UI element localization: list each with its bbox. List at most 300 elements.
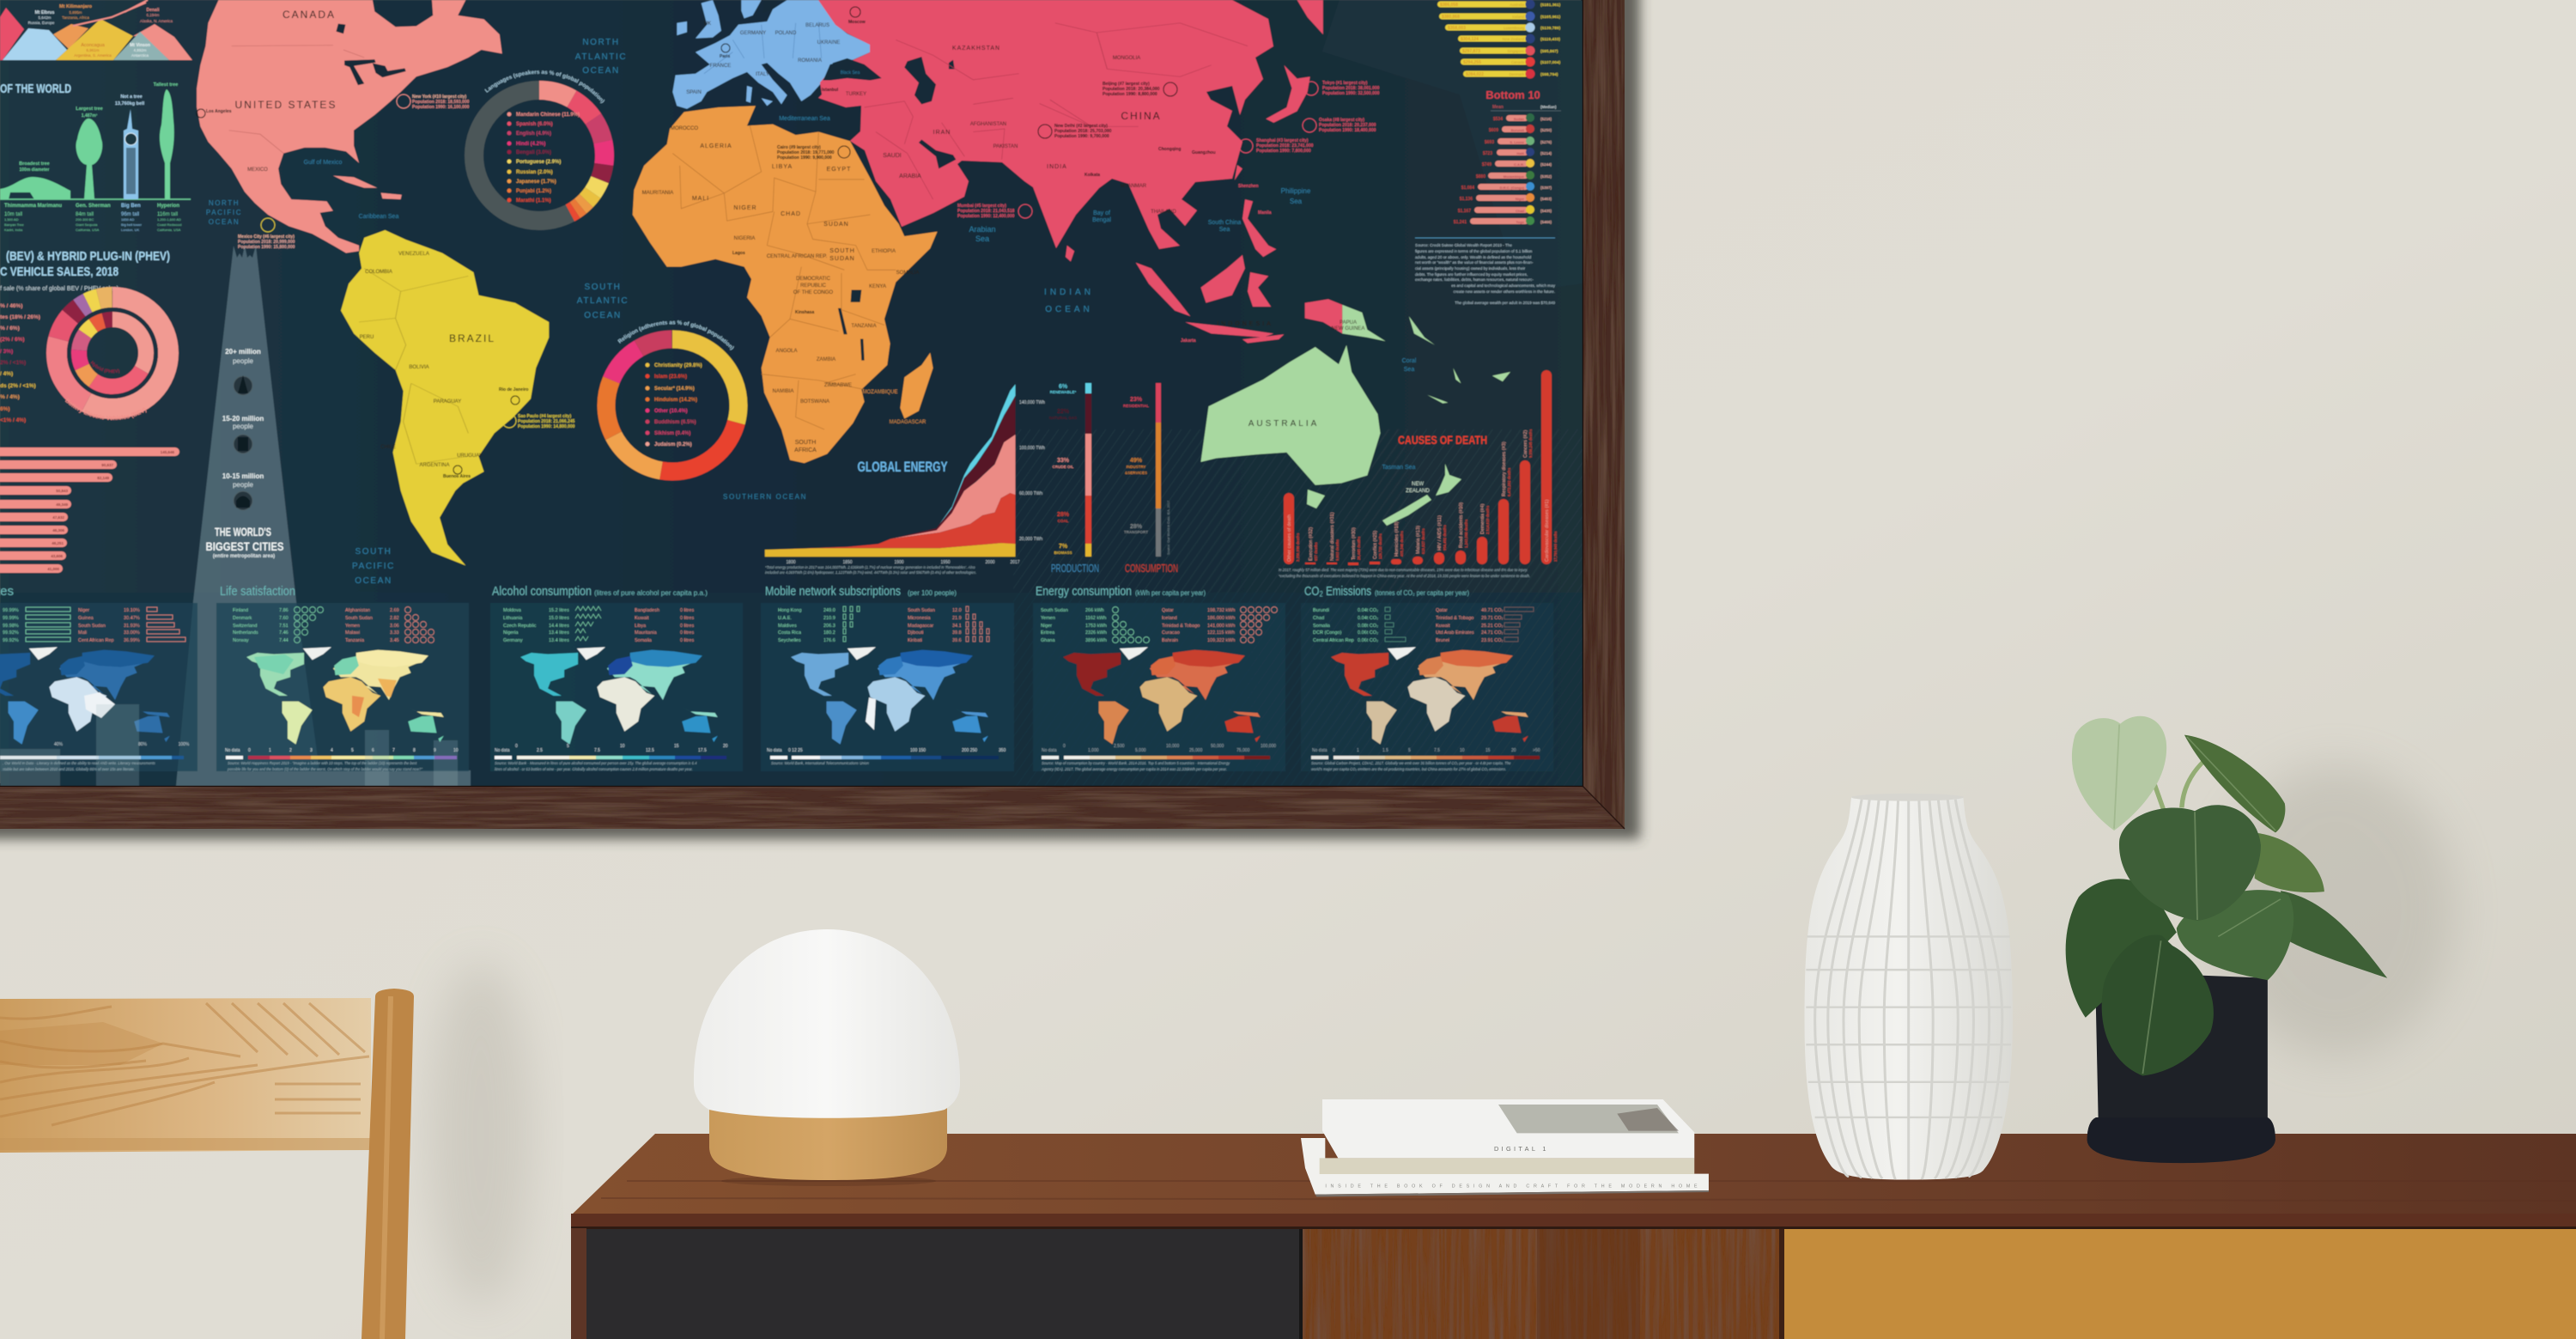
country share list: (2% / 6%) [0,337,25,343]
panel: life satisfaction: 8 [413,748,416,753]
chart: causes of death: 405,346 deaths [1400,531,1404,557]
chart: causes of death: Malaria (#13) [1416,526,1421,554]
panel: CO2 emissions: 29.71 CO₂ [1481,616,1504,621]
chart: causes of death: 3,356,996 deaths [1296,533,1300,562]
mountains chart: Alaska, N. America [140,19,173,23]
panel: life satisfaction: Finland [233,608,248,613]
chart: global energy: 1900 [894,560,904,565]
tallest trees chart: 116m tall [157,212,178,217]
panel: life satisfaction: 3.45 [390,638,399,643]
chart: causes of death: 9,556,245 deaths [1528,429,1533,458]
mountains chart [0,0,192,60]
country labels: SAUDI [883,153,902,159]
panel: energy consumption: 10,000 [1166,744,1180,749]
panel: literacy rates: Niger [78,608,89,613]
bottom wealth rows: Haiti [1516,151,1524,155]
country labels: ROMANIA [798,58,822,64]
panel: mobile network subscriptions: Kiribati [908,638,922,643]
city callouts: Osaka (#8 largest city) [1319,118,1364,123]
top wealth rows: ($181,361) [1540,3,1561,8]
panel: CO2 emissions: world's major per capita CO₂ emitters are the oil producing countries, but China accounts for 27% of global CO₂ emissions. [1311,767,1506,771]
panel: mobile network subscriptions: Madagascar [908,624,933,629]
chair backrest [0,998,371,1153]
panel: CO2 emissions: 0 [1333,748,1335,753]
tallest trees chart: Hyperion [157,204,179,209]
city callouts: Population 2018: 25,703,000 [1054,129,1112,134]
city callouts: New Delhi (#2 largest city) [1054,124,1108,129]
panel: CO2 emissions: 15 [1485,748,1491,753]
bottom wealth rows: $609 [1489,128,1498,133]
bottom wealth rows: C.A.R. [1514,162,1524,167]
panel: mobile network subscriptions: No data [767,748,782,753]
panel: energy consumption [1033,584,1285,771]
country labels: SOMALIA [896,271,919,276]
panel: CO2 emissions: Kuwait [1436,624,1450,629]
country share list: tes (18% / 26%) [0,314,40,320]
production bar: CRUDE OIL [1053,465,1074,469]
country labels: NEW GUINEA [1332,326,1364,332]
panel: energy consumption: Niger [1041,624,1052,629]
ocean labels [206,38,1417,586]
country labels: SOUTH [829,248,855,254]
bottom wealth rows: $534 [1493,117,1503,122]
panel: literacy rates: 19.10% [124,608,140,613]
panel: mobile network subscriptions: Micronesia [908,616,932,621]
country share list: / 3%) [0,349,13,355]
panel: literacy rates: 36.99% [124,638,140,643]
panel: energy consumption: 75,000 [1236,748,1250,753]
legend: mobile subscriptions [770,756,999,759]
tallest trees chart: Big bell tower [121,222,143,227]
panel: CO2 emissions: 1.5 [1382,748,1388,753]
country labels: MOZAMBIQUE [862,390,898,395]
total sales bars: 50,843 [56,489,68,493]
bottom wealth rows: Burundi [1511,128,1524,132]
panel: literacy rates: 99.92% [3,638,19,643]
top wealth rows: ($139,789) [1540,26,1561,31]
top wealth rows: $294,255 [1463,60,1481,65]
country labels: ZIMBABWE [824,383,852,388]
panel: energy consumption: Trinidad & Tobago [1162,624,1200,629]
country labels: CHAD [781,211,801,217]
country labels: BELARUS [805,23,829,28]
city callouts: Population 2018: 20,999,000 [238,240,295,245]
panel: energy consumption: 2326 kWh [1085,630,1107,636]
bottom wealth rows: ($214) [1540,151,1552,155]
city callouts: Population 2018: 20,237,000 [1319,123,1376,128]
panel: alcohol consumption: 12.5 [646,748,654,753]
panel: life satisfaction: Tanzania [345,638,365,643]
map: alcohol [520,647,718,745]
donut: religion: Judaism (0.2%) [654,442,692,447]
panel: alcohol consumption: Moldova [503,608,522,613]
country labels: ANGOLA [775,349,798,354]
panel: energy consumption: 186,000 kWh [1207,616,1235,621]
panel: CO2 emissions: CO₂ Emissions [1304,584,1371,599]
top wealth rows: $284,022 [1466,72,1484,77]
chart: global energy: 20,000 TWh [1019,537,1042,542]
panel: life satisfaction: Malawi [345,630,360,636]
panel: CO2 emissions: Qatar [1436,608,1448,613]
donut: languages: Punjabi (1.2%) [516,189,551,194]
chart: causes of death: 954,492 deaths [1443,525,1447,551]
mountains chart: 6,194m [146,13,160,17]
panel: CO2 emissions: Trinidad & Tobago [1436,616,1473,621]
panel: world's biggest cities: 20+ million [225,348,261,356]
country share list: 6%) [0,406,10,412]
donut: BEV and PHEV shares: Battery Electric Vehicles (BEV) [64,399,148,421]
ocean labels: Black Sea [841,70,860,76]
ocean labels: OCEAN [355,576,392,586]
country share list: 2% / <1%) [0,360,26,366]
ocean labels: OCEAN [582,66,620,76]
panel: alcohol consumption: 5 [567,744,569,749]
electric vehicle sales section: C VEHICLE SALES, 2018 [0,265,118,279]
city callouts: Mexico City (#6 largest city) [238,234,295,240]
consumption bar: Source: Our World in Data, IEA, 2017 [1167,501,1170,555]
panel: energy consumption: 2,500 [1114,744,1125,749]
country labels: NIGERIA [734,236,755,241]
panel: alcohol consumption: Lithuania [503,616,523,621]
bottom wealth rows: ($276) [1540,140,1552,144]
panel: mobile network subscriptions: Mobile network subscriptions [765,584,901,599]
panel: energy consumption: Source: Map of consumption by country - World Bank, 2014-2016. Top 5 and bottom 5 countries - International Energy [1042,761,1230,765]
country labels: MADAGASCAR [890,420,927,425]
panel: life satisfaction: 2.69 [390,608,399,613]
ocean labels: PACIFIC [206,209,242,216]
country labels: CANADA [283,9,336,21]
panel: mobile network subscriptions: 249.0 [823,608,835,613]
tallest trees chart: 1859 AD [121,217,134,222]
panel: literacy rates: 30.47% [124,616,140,621]
tallest trees chart: 1,200-1,600 AD [157,217,181,222]
chart: global energy: *Total energy production in 2017 was 164,000TWh. 2,636kWh (1.7%) of nuclear energy generation is included in 'Renewables'. Also [765,565,975,569]
panel: life satisfaction: 1 [269,748,271,753]
total sales bars: 90,637 [101,463,113,467]
panel: life satisfaction: No data [225,748,240,753]
city callouts: Los Angeles [206,109,232,114]
panel: mobile network subscriptions: 200 250 [962,748,977,753]
donut: languages: Russian (2.0%) [516,170,553,175]
chart: global energy: 1850 [842,560,853,565]
source note: debts. The figures are further influenced by equity market prices, [1415,272,1528,277]
icon: tower [234,435,252,453]
country labels: PARAGUAY [434,399,461,405]
panel: literacy rates: 100% [179,742,190,747]
top wealth rows: Denmark [1510,72,1525,76]
country labels: ETHIOPIA [872,249,896,254]
panel: life satisfaction: Afghanistan [345,608,370,613]
chart: causes of death: 17,790,949 deaths [1553,531,1558,562]
country share list: % / 46%) [0,303,22,309]
donut: religion: Other (10.4%) [654,409,688,414]
ocean labels: PACIFIC [352,562,395,571]
panel: CO2 emissions: No data [1312,748,1327,753]
ocean labels: Gulf of Mexico [304,160,342,166]
panel: alcohol consumption: 15.2 litres [549,608,569,613]
stacked books [1301,1099,1709,1196]
country labels: PAKISTAN [993,144,1018,149]
country share list: % / 4%) [0,394,20,400]
panel: alcohol consumption: 17.5 [698,748,707,753]
city callouts: Population 2018: 23,741,000 [1256,143,1314,149]
legend: life satisfaction [226,756,457,759]
ocean labels: OCEAN [1045,305,1093,314]
city callouts: Population 1990: 8,800,000 [1103,92,1157,97]
country labels: MONGOLIA [1113,56,1140,61]
panel: life satisfaction: 7.60 [279,616,289,621]
top wealth rows: Singapore [1507,49,1525,53]
source note: create new assets or render others worthless in the future. [1454,289,1555,294]
country labels: ARGENTINA [419,463,450,468]
panel: mobile network subscriptions: 21.9 [952,616,962,621]
legend: energy [1042,756,1270,759]
ocean labels: Caribbean Sea [359,214,398,220]
chart: global energy: 100,000 TWh [1019,446,1045,451]
panel: life satisfaction: Norway [233,638,249,643]
country labels: ZEALAND [1406,489,1430,494]
production bar: NATURAL GAS [1049,416,1077,420]
panel: mobile network subscriptions: 12.0 [952,608,962,613]
panel: alcohol consumption: 0 litres [680,624,694,629]
city callouts: Mumbai (#5 largest city) [957,204,1006,209]
sideboard cabinet [571,1134,2576,1339]
panel: mobile network subscriptions [761,584,1014,771]
panel: mobile network subscriptions: 206.3 [823,624,835,629]
ocean labels: ATLANTIC [577,296,629,306]
country labels: CHILE [380,445,396,450]
chart: causes of death: Homicides (#18) [1394,521,1400,557]
country labels: AFRICA [794,447,817,453]
chart: causes of death: Terrorism (#30) [1352,527,1357,560]
country labels: NEW [1412,482,1424,487]
consumption bar: TRANSPORT [1124,530,1148,534]
panel: literacy rates: stable but are taken between 2010 and 2016. Globally 86% of over 15s are literate. [3,767,135,771]
city callouts: Population 2018: 38,001,000 [1322,86,1380,91]
country labels: AUSTRALIA [1249,419,1319,429]
panel: energy consumption: 25,000 [1189,748,1203,753]
production bar: BIOMASS [1054,551,1072,555]
lamp glass dome [694,929,960,1118]
continent: South America [341,230,549,565]
country labels: CENTRAL AFRICAN REP. [767,254,828,259]
bottom wealth rows: $1,136 [1460,197,1473,202]
panel: life satisfaction: 9 [434,748,436,753]
panel: energy consumption: Agency (IEA), 2017. The global average energy consumption per capita in 2014 was 22,336kWh per capita per year. [1041,767,1227,771]
panel: energy consumption: 266 kWh [1085,608,1104,613]
production bar: PRODUCTION [1051,562,1099,575]
panel: life satisfaction: 3.33 [390,630,399,636]
panel: mobile network subscriptions: Source: World Bank, International Telecommunications Union [771,761,870,765]
country labels: UNITED STATES [235,99,337,111]
panel: energy consumption: 3896 kWh [1085,638,1107,643]
city callouts: Population 2018: 21,066,245 [518,419,575,424]
panel: CO2 emissions: DCR (Congo) [1313,630,1341,636]
chair post [361,989,414,1339]
panel: life satisfaction [216,584,469,771]
map: literacy [0,647,170,745]
city callouts: Tokyo (#1 largest city) [1322,81,1368,86]
donut: languages: Spanish (6.0%) [516,122,553,127]
donut: BEV and PHEV shares [46,286,179,421]
total sales bars: 82,149 [97,476,109,480]
continent: Europe [672,0,870,109]
panel: CO2 emissions: 5 [1408,748,1411,753]
panel: alcohol consumption: 14.4 litres [549,624,569,629]
chart: global energy: 2017 [1010,560,1020,565]
city callouts: Population 1990: 15,800,000 [238,245,295,250]
cabinet top [571,1134,2576,1215]
total sales bars: 41,000 [47,567,59,571]
panel: alcohol consumption: No data [495,748,510,753]
production bar: COAL [1058,519,1069,523]
panel: CO2 emissions: 24.71 CO₂ [1481,630,1504,636]
panel: literacy rates [0,584,197,771]
city callouts: Lagos [732,251,745,256]
saucer [2087,1117,2275,1163]
country labels: CHINA [1121,110,1162,122]
tallest trees chart: 100m diameter [19,167,50,173]
panel: CO2 emissions: Brunei [1436,638,1449,643]
tallest trees chart: Largest tree [76,107,103,112]
panel: CO2 emissions: 0.06t CO₂ [1358,638,1378,643]
top wealth rows: ($98,794) [1540,72,1558,77]
city callouts: Population 2018: 20,384,000 [1103,87,1160,92]
production bar: 28% [1057,512,1070,518]
panel: literacy rates: 99.99% [3,608,19,613]
top wealth rows: New Zealand [1503,37,1525,41]
panel: literacy rates: 40% [54,742,64,747]
panel: world's biggest cities: THE WORLD'S [215,525,271,539]
panel: energy consumption: 141,000 kWh [1207,624,1235,629]
mountains chart: Denali [146,8,160,13]
electric vehicle sales section: f sale (% share of global BEV / PHEV sales) [0,284,118,292]
panel: alcohol consumption: Somalia [635,638,653,643]
panel: life satisfaction: 2 [289,748,292,753]
panel: alcohol consumption: Mauritania [635,630,658,636]
chair [0,989,414,1339]
country labels: TANZANIA [851,324,877,329]
panel: life satisfaction: 7.46 [279,630,289,636]
country labels [235,9,1430,494]
panel: alcohol consumption: litres of alcohol - or 63 bottles of wine - per year. Globally alcohol consumption causes 2.8 million premature deaths per year. [495,767,693,771]
source note: exchange rates, liabilities, debts, human resources, natural resourc- [1415,277,1534,282]
panel: CO2 emissions: >50 [1533,748,1540,753]
country labels: SUDAN [829,256,855,262]
country labels: EGYPT [827,167,851,173]
ocean labels: OCEAN [584,311,622,320]
stacked area chart [765,384,1015,557]
city callouts: Population 1990: 9,700,000 [1054,134,1109,139]
country labels: REPUBLIC [800,283,827,289]
chart: causes of death: Conflict (#25) [1373,531,1378,559]
country labels: SUDAN [823,222,849,228]
consumption bar: &SERVICES [1125,471,1147,475]
total sales bars: 43,606 [51,554,63,558]
donut: religion: Religion (adherents as % of global population) [617,320,735,350]
chart: causes of death: 2,514,619 deaths [1485,505,1490,534]
panel: CO2 emissions: 7.5 [1434,748,1440,753]
panel: energy consumption: South Sudan [1041,608,1068,613]
country labels: MALI [692,196,709,202]
panel: alcohol consumption: 20 [723,744,728,749]
lamp cork base [709,1108,947,1180]
panel: life satisfaction: Life satisfaction [220,584,295,599]
panel: alcohol consumption: Source: World Bank - Measured in litres of pure alcohol consumed per person over 15y. The global average consumption is 6.4 [495,761,697,765]
bottom wealth rows: Chad [1516,209,1525,213]
total sales bars: 49,349 [56,502,68,507]
bottom wealth rows: ($244) [1540,162,1552,167]
donut: languages: Hindi (4.2%) [516,142,545,147]
drawer: walnut [1303,1229,1779,1339]
panel: energy consumption: 1,000 [1088,748,1099,753]
lamp [694,929,960,1186]
heading: trees: OF THE WORLD [0,82,71,96]
donut: religion: Islam (23.6%) [654,374,687,380]
country labels: BRAZIL [449,332,495,344]
consumption bar: INDUSTRY [1127,465,1145,469]
ocean labels: SOUTHERN OCEAN [723,493,807,501]
panel: life satisfaction: 7.44 [279,638,289,643]
city callouts: Population 2018: 19,771,000 [777,150,835,155]
production bar: 6% [1059,384,1068,390]
city callouts: Population 2018: 18,593,000 [412,100,470,105]
panel: alcohol consumption: (litres of pure alcohol per capita p.a.) [594,589,708,597]
panel: CO2 emissions: Burundi [1313,608,1329,613]
source note [1415,238,1556,305]
panel: mobile network subscriptions: Seychelles [778,638,801,643]
top wealth rows: ($165,961) [1540,15,1561,20]
cabinet front edge [571,1214,2576,1228]
donut: religion [596,320,749,481]
panel: mobile network subscriptions: 39.8 [952,630,962,636]
panel: mobile network subscriptions: 100 150 [910,748,926,753]
city callouts: Rio de Janeiro [499,387,528,393]
panel: CO2 emissions: Somalia [1313,624,1331,629]
bottom wealth rows: D.R.C. (Congo) [1500,186,1525,190]
panel: life satisfaction: 0 [248,748,251,753]
bottom wealth rows: Togo [1516,220,1525,224]
source note: cial assets (principally housing) owned by individuals, less their [1415,266,1526,271]
country labels: OF THE CONGO [793,290,833,295]
chart: global energy: included are 4,069TWh (2.6%) hydropower, 1,123TWh (0.7%) wind, 447TWh (0.3%) solar and 596TWh (0.4%) of other technologies. [765,570,976,575]
bottom wealth rows: $723 [1483,151,1492,156]
panel: mobile network subscriptions: 180.2 [823,630,835,636]
panel: energy consumption: Iceland [1162,616,1177,621]
city callouts: Kinshasa [795,310,814,315]
donut: languages: Japanese (1.7%) [516,180,556,185]
chart: causes of death: 9,603 deaths [1335,539,1340,561]
ocean labels: Sea [1404,367,1414,373]
top wealth rows: ($119,433) [1540,37,1560,42]
ocean labels: Arabian [969,225,996,234]
panel: CO2 emissions: Central African Rep [1313,638,1354,643]
potted plant [2066,716,2387,1163]
chart: causes of death: In 2017, roughly 57 million died. The vast majority (73%) were due to non-communicable diseases, 19% were due to infectious disease and 8% due to injury. [1279,568,1528,572]
country labels: MYANMAR [1121,184,1147,189]
city callouts: Population 1990: 7,800,000 [1256,149,1311,154]
panel: CO2 emissions: 25.21 CO₂ [1481,624,1504,629]
panel: literacy rates: South Sudan [78,624,106,629]
icon: skyscraper [234,375,252,395]
consumption bar: CONSUMPTION [1125,562,1178,575]
panel: life satisfaction: 10 [453,748,459,753]
chart: global energy: 1950 [940,560,951,565]
city callouts: Shenzhen [1238,184,1259,189]
consumption bar [1123,383,1178,575]
panel: life satisfaction: 5 [351,748,354,753]
tallest trees chart: 84m tall [76,212,94,217]
